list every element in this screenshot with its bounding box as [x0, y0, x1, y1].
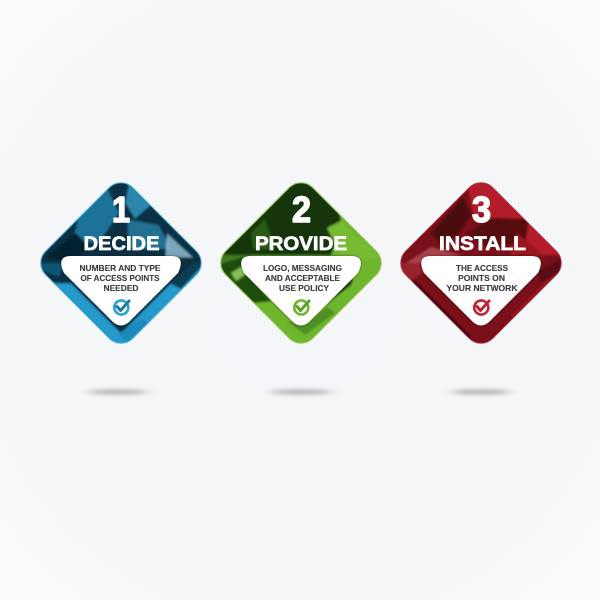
heading number 1: 1 — [112, 189, 130, 230]
description text — [263, 264, 342, 293]
floor shadow: badge 1 — [88, 389, 148, 395]
description text: OF ACCESS POINTS — [80, 274, 160, 283]
panel: step 1 decide — [40, 182, 202, 344]
badge photo background: green — [220, 182, 382, 344]
heading INSTALL: INSTALL — [439, 233, 526, 255]
white card — [61, 256, 181, 326]
description text: LOGO, MESSAGING — [263, 264, 342, 273]
heading DECIDE: DECIDE — [84, 233, 160, 255]
panel: step 2 provide — [220, 182, 382, 344]
icon: check badge — [294, 301, 309, 315]
description text: THE ACCESS — [456, 264, 509, 273]
floor shadow: badge 3 — [451, 389, 511, 395]
badge photo background: red — [400, 182, 562, 344]
description text: POINTS ON — [458, 274, 505, 283]
badge photo background: blue — [40, 182, 202, 344]
description text: NEEDED — [104, 284, 139, 293]
white card — [421, 256, 541, 326]
description text: NUMBER AND TYPE — [80, 264, 161, 273]
icon: check badge — [114, 301, 129, 315]
description text — [80, 264, 161, 293]
heading number 3: 3 — [472, 189, 491, 230]
white card — [241, 256, 361, 326]
description text: YOUR NETWORK — [446, 284, 518, 293]
description text: USE POLICY — [279, 284, 330, 293]
description text: AND ACCEPTABLE — [265, 274, 341, 283]
icon: check badge — [474, 301, 489, 315]
heading PROVIDE: PROVIDE — [255, 233, 347, 255]
description text — [446, 264, 518, 293]
floor shadow: badge 2 — [271, 389, 331, 395]
panel: step 3 install — [400, 182, 562, 344]
heading number 2: 2 — [292, 189, 311, 230]
